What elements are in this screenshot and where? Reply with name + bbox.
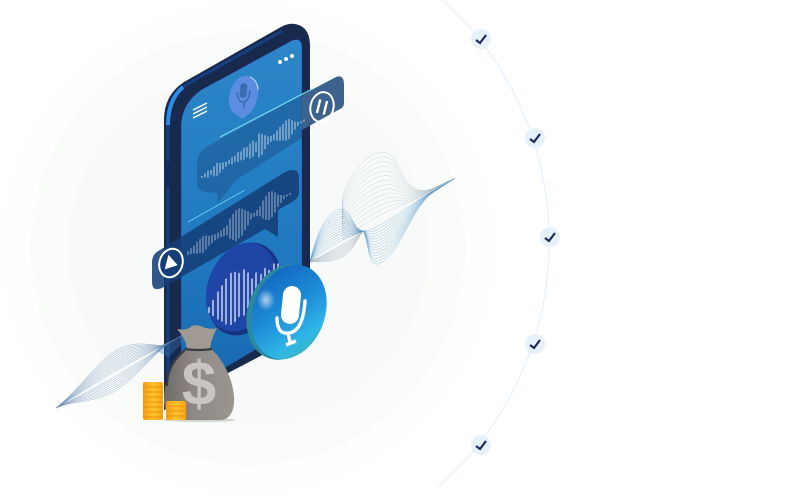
dollar sign: $ — [182, 350, 216, 419]
phone — [164, 24, 310, 410]
coin stack: left — [143, 382, 163, 420]
phone metal band — [168, 31, 282, 406]
message panel: pause bubble — [197, 76, 344, 203]
sound wave: left side — [56, 299, 206, 425]
waveform: lower — [188, 179, 290, 269]
bag tie — [167, 349, 212, 386]
check marker 5 — [471, 435, 491, 455]
message panel: play bubble — [152, 170, 299, 289]
pause bar outside phone — [302, 76, 344, 130]
waveform: badge — [209, 250, 278, 336]
microphone coin — [233, 253, 339, 371]
background concentric glow — [0, 0, 496, 496]
check marker 3 — [540, 227, 560, 247]
waveform: upper — [202, 109, 304, 189]
check marker 4 — [525, 334, 545, 354]
coin stack: right — [166, 401, 186, 420]
bag neck — [177, 325, 217, 349]
button: pause — [307, 90, 337, 124]
icon: microphone bubble — [229, 76, 258, 118]
money bag — [164, 325, 236, 422]
bag body — [164, 349, 234, 420]
icon: menu — [193, 103, 207, 118]
oval audio badge — [193, 231, 294, 347]
phone body — [164, 24, 310, 410]
icon: microphone — [277, 285, 305, 345]
sound wave: right side — [310, 107, 455, 304]
check marker 1 — [471, 29, 491, 49]
phone screen — [181, 40, 302, 394]
timeline arc — [438, 0, 549, 487]
phone side button — [165, 161, 170, 188]
icon: three dots — [278, 54, 294, 64]
check marker 2 — [525, 128, 545, 148]
button: play — [156, 246, 186, 280]
bag shadow — [164, 418, 236, 422]
phone corner highlight — [168, 87, 183, 125]
